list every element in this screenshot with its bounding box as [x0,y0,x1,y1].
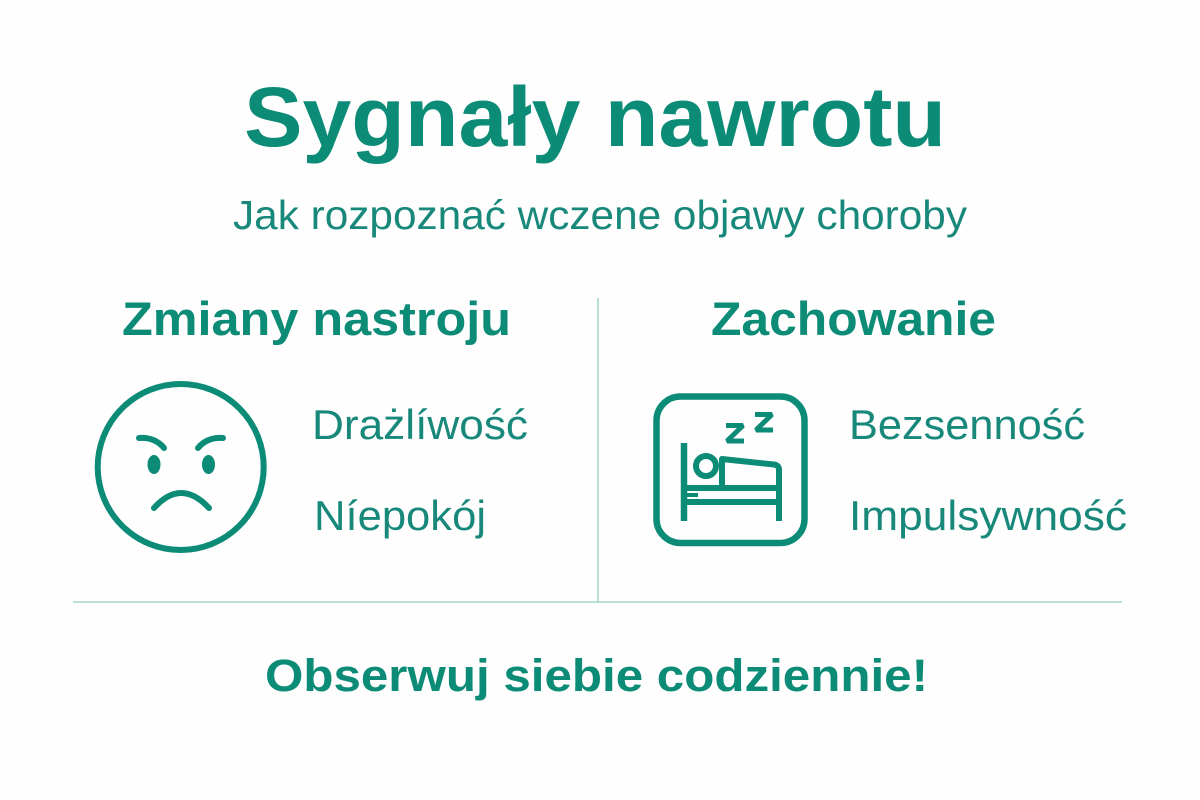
title: Sygnały nawrotu [244,70,946,164]
heading: mood changes: Zmiany nastroju [122,292,511,345]
icon: person sleeping in bed [656,396,804,543]
panel: behaviour [656,292,1127,543]
divider lines [73,298,1122,602]
label: impulsivity: Impulsywność [849,492,1127,539]
subtitle: Jak rozpoznać wczene objawy choroby [233,192,968,238]
footer message: Obserwuj siebie codziennie! [265,650,928,701]
label: irritability: Drażlíwość [312,401,528,448]
label: insomnia: Bezsenność [849,401,1085,448]
panel: mood changes [98,292,528,550]
icon: angry face [98,384,264,550]
label: anxiety: Níepokój [314,492,486,539]
heading: behaviour: Zachowanie [711,292,996,345]
